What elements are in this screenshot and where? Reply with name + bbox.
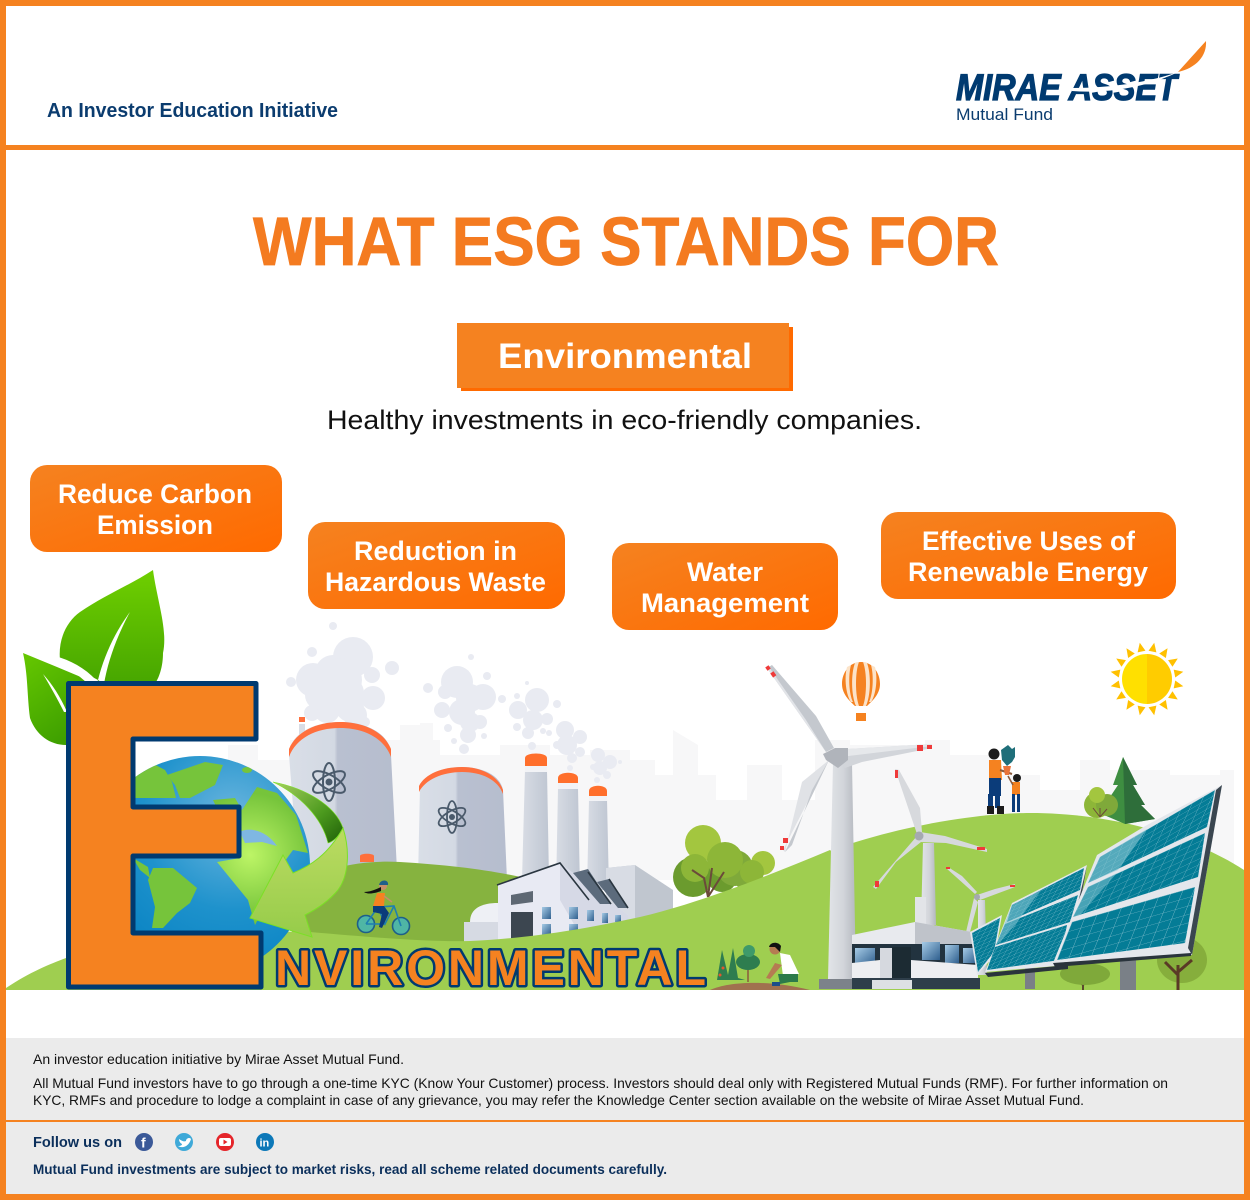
leaves <box>23 570 164 745</box>
pill: reduction in hazardous waste <box>308 522 565 609</box>
pill: water management: Management <box>641 588 809 618</box>
dark green hill with cyclist ground <box>292 862 525 945</box>
solar panel medium <box>985 865 1087 989</box>
disclaimer paragraph: All Mutual Fund investors have to go through a one-time KYC (Know Your Customer) process. Investors should deal only with Registered Mutual Funds (RMF). For further information on <box>33 1075 1168 1091</box>
logo: Mirae Asset Mutual Fund: Mutual Fund <box>956 105 1053 124</box>
pine tree and shrub <box>1084 757 1155 824</box>
pill: renewable energy <box>881 512 1176 599</box>
smoke clouds <box>286 622 622 783</box>
recycling arrow <box>250 782 347 937</box>
cooling tower two <box>418 767 507 880</box>
section badge: Environmental: Environmental <box>498 337 752 376</box>
follow us label: Follow us on <box>33 1134 122 1151</box>
footer disclaimer panel <box>6 1038 1244 1194</box>
sun <box>1110 642 1184 716</box>
letter E <box>68 684 261 987</box>
icon: facebook <box>135 1133 153 1151</box>
illustration: environmental landscape <box>6 570 1244 996</box>
header tagline: An Investor Education Initiative <box>47 100 338 122</box>
gardener with plants <box>710 943 810 990</box>
logo: Mirae Asset Mutual Fund <box>956 41 1206 124</box>
pill: water management: Water <box>687 557 764 587</box>
icon: youtube <box>216 1133 234 1151</box>
icon: linkedin <box>256 1133 274 1151</box>
parent and child planting tree <box>987 745 1021 814</box>
solar panel large <box>1053 785 1222 990</box>
factory <box>464 863 673 945</box>
wind turbine small <box>946 867 1015 975</box>
logo: Mirae Asset Mutual Fund: MIRAE ASSET <box>956 67 1180 108</box>
smoke stacks <box>522 754 609 890</box>
disclaimer paragraph <box>33 1075 1168 1108</box>
background trees <box>1060 937 1207 990</box>
hot-air balloon <box>842 662 880 721</box>
wind turbine large <box>765 665 932 989</box>
pill: reduction in hazardous waste: Reduction in <box>354 536 517 566</box>
light green hills <box>6 813 1244 990</box>
icon: facebook: f <box>141 1134 146 1150</box>
pill: reduce carbon emission: Emission <box>97 510 213 540</box>
disclaimer line one: An investor education initiative by Mirae Asset Mutual Fund. <box>33 1051 404 1067</box>
section badge: Environmental <box>457 323 793 391</box>
round tree <box>673 825 775 897</box>
pill: renewable energy: Renewable Energy <box>908 557 1148 587</box>
icon: linkedin: in <box>260 1138 270 1150</box>
wind turbine medium <box>873 769 987 925</box>
pill: water management <box>612 543 838 630</box>
disclaimer paragraph: KYC, RMFs and procedure to lodge a complaint in case of any grievance, you may refer the Knowledge Center section available on the website of Mirae Asset Mutual Fund. <box>33 1092 1084 1108</box>
subtitle: Healthy investments in eco-friendly companies. <box>327 405 922 435</box>
main title: WHAT ESG STANDS FOR <box>253 203 999 280</box>
icon: twitter <box>175 1133 193 1151</box>
pill: reduce carbon emission: Reduce Carbon <box>58 479 252 509</box>
risk statement: Mutual Fund investments are subject to market risks, read all scheme related documents carefully. <box>33 1161 667 1177</box>
solar panel small <box>970 915 1002 975</box>
control building <box>852 897 980 989</box>
pill: reduction in hazardous waste: Hazardous Waste <box>325 567 546 597</box>
header band <box>47 41 1206 124</box>
cooling tower one <box>289 717 397 870</box>
cyclist <box>358 880 410 934</box>
city skyline <box>228 723 1234 880</box>
pill: renewable energy: Effective Uses of <box>922 526 1136 556</box>
small orange stub <box>360 854 374 862</box>
word NVIRONMENTAL: NVIRONMENTAL <box>275 940 706 996</box>
globe with continents <box>136 756 310 956</box>
pill: reduce carbon emission <box>30 465 282 552</box>
